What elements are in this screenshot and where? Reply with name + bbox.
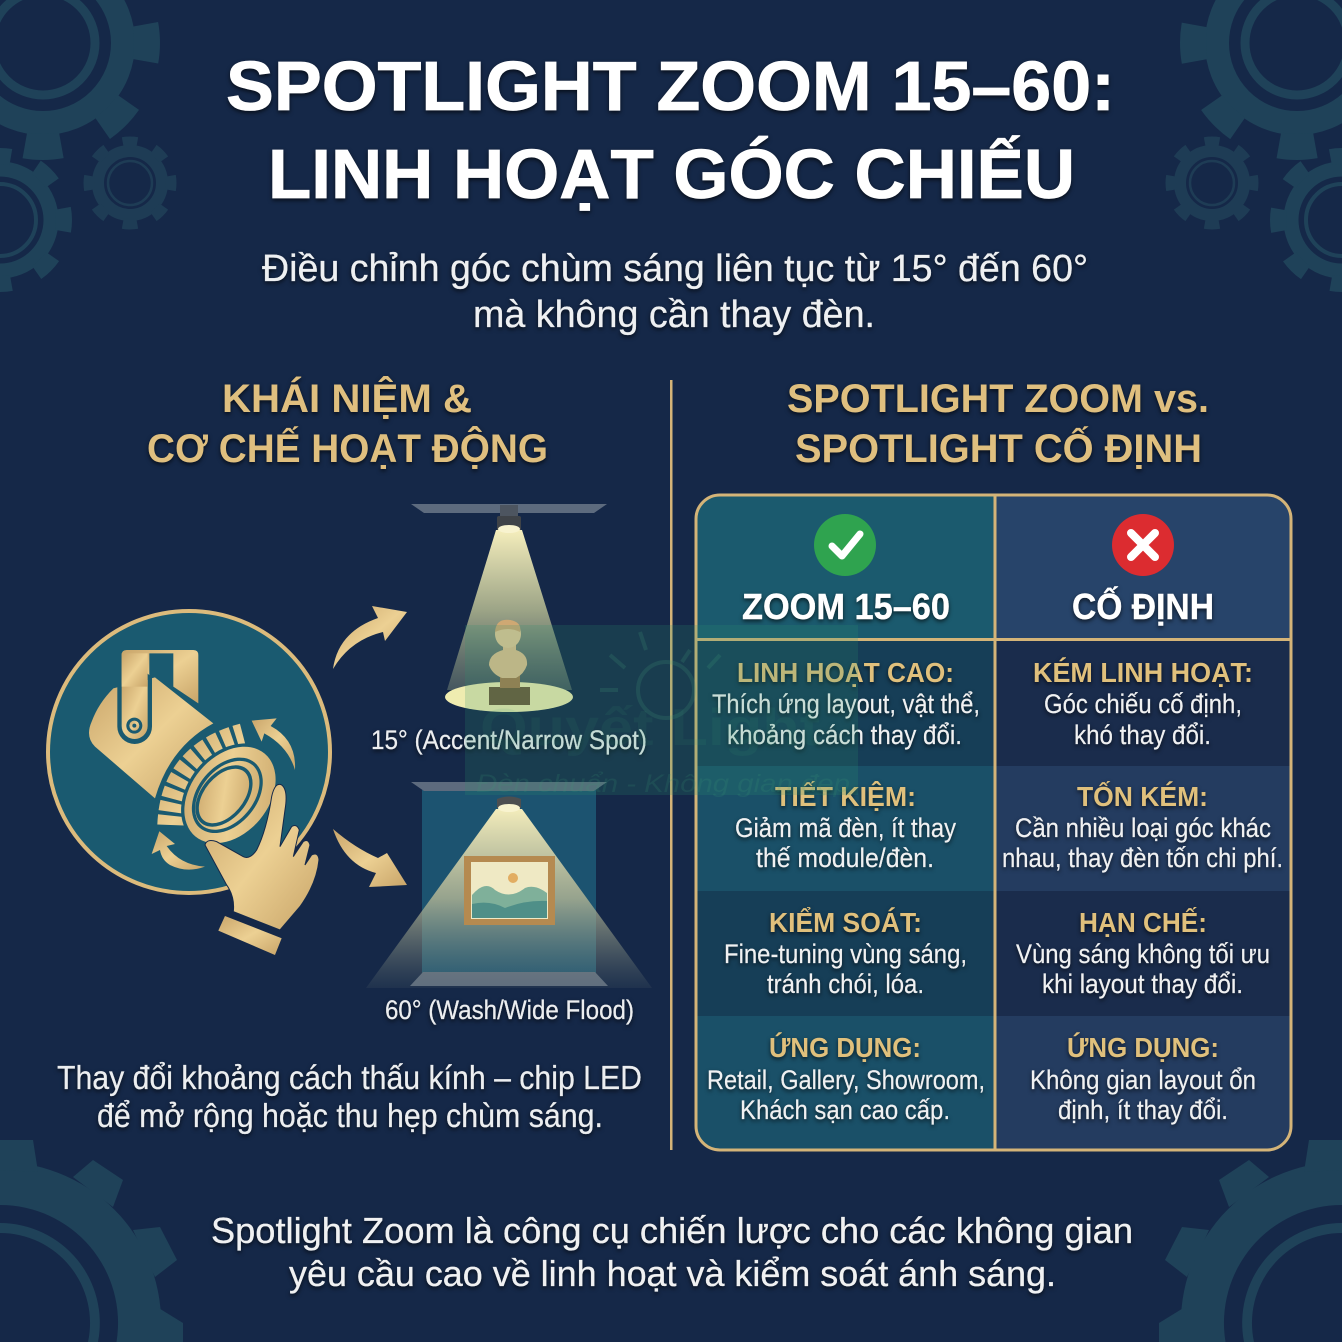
column header: zoom: ZOOM 15–60 (742, 586, 950, 627)
subtitle: mà không cần thay đèn. (473, 294, 875, 336)
fixed: cost: TỐN KÉM: (1077, 780, 1208, 812)
zoom: flexibility (712, 657, 980, 750)
mechanism description (57, 1059, 642, 1134)
zoom: applications: ỨNG DỤNG: (769, 1032, 921, 1063)
closing statement: yêu cầu cao về linh hoạt và kiểm soát ánh sáng. (289, 1253, 1056, 1294)
zoom: flexibility: Thích ứng layout, vật thể, (712, 689, 980, 719)
heading: comparison (787, 377, 1209, 471)
illustration part: bust statue (489, 620, 530, 705)
illustration: 60 degree wide flood (366, 782, 652, 988)
zoom: control: KIỂM SOÁT: (769, 907, 922, 938)
watermark: Đèn chuẩn - Không gian đẹp (476, 770, 850, 798)
zoom: control (724, 907, 967, 999)
icon part: rotation arrows (152, 718, 295, 870)
icon part: spotlight head (89, 650, 299, 866)
heading: comparison: SPOTLIGHT ZOOM vs. (787, 377, 1209, 421)
illustration: 15 degree narrow spot (411, 504, 607, 712)
subtitle: Điều chỉnh góc chùm sáng liên tục từ 15° đến 60° (262, 248, 1088, 290)
label: 15 degree: 15° (Accent/Narrow Spot) (371, 725, 647, 755)
zoom: savings: TIẾT KIỆM: (775, 781, 916, 812)
fixed: limits (1016, 907, 1270, 999)
arrow: to narrow beam (333, 606, 407, 669)
zoom: control: tránh chói, lóa. (767, 969, 924, 999)
fixed: applications: định, ít thay đổi. (1058, 1095, 1228, 1125)
mechanism description: để mở rộng hoặc thu hẹp chùm sáng. (97, 1097, 603, 1134)
title: LINH HOẠT GÓC CHIẾU (268, 135, 1075, 213)
fixed: flexibility: khó thay đổi. (1074, 720, 1211, 750)
fixed: applications (1030, 1032, 1256, 1125)
illustration part: framed landscape (464, 856, 555, 925)
zoom: applications (707, 1032, 985, 1125)
heading: concept and mechanism: KHÁI NIỆM & (222, 375, 472, 421)
heading: comparison: SPOTLIGHT CỐ ĐỊNH (795, 425, 1202, 471)
zoom: control: Fine-tuning vùng sáng, (724, 939, 967, 969)
background gear: bottom right (1159, 1140, 1342, 1342)
heading: concept and mechanism: CƠ CHẾ HOẠT ĐỘNG (147, 425, 548, 471)
icon: red cross (1112, 514, 1174, 576)
fixed: cost: Cần nhiều loại góc khác (1015, 813, 1271, 843)
zoom: applications: Retail, Gallery, Showroom, (707, 1065, 985, 1095)
comparison table (696, 495, 1291, 1150)
fixed: applications: ỨNG DỤNG: (1067, 1032, 1219, 1063)
heading: concept and mechanism (147, 375, 548, 471)
fixed: cost: nhau, thay đèn tốn chi phí. (1002, 843, 1283, 873)
fixed: limits: khi layout thay đổi. (1042, 969, 1243, 999)
background gears: top (0, 0, 1342, 284)
watermark: Quyết Light (480, 699, 820, 757)
zoom: flexibility: khoảng cách thay đổi. (727, 720, 962, 750)
title (226, 47, 1115, 213)
illustration part: lit floor (445, 682, 573, 712)
icon: hand adjusting spotlight lens (48, 611, 330, 955)
zoom: savings (735, 781, 956, 873)
closing statement: Spotlight Zoom là công cụ chiến lược cho các không gian (211, 1210, 1133, 1251)
title: SPOTLIGHT ZOOM 15–60: (226, 47, 1115, 125)
closing statement (211, 1210, 1133, 1294)
fixed: limits: Vùng sáng không tối ưu (1016, 939, 1270, 969)
column divider (670, 380, 672, 1150)
background gear: bottom left (0, 1140, 183, 1342)
column header: fixed: CỐ ĐỊNH (1072, 585, 1214, 627)
zoom: applications: Khách sạn cao cấp. (740, 1095, 950, 1125)
icon part: hand (205, 784, 319, 955)
fixed: flexibility (1033, 657, 1253, 750)
zoom: savings: thế module/đèn. (756, 843, 934, 873)
icon: green check (814, 514, 876, 576)
fixed: cost (1002, 780, 1283, 873)
zoom: savings: Giảm mã đèn, ít thay (735, 813, 956, 843)
watermark (465, 625, 858, 798)
label: 60 degree: 60° (Wash/Wide Flood) (385, 995, 634, 1025)
mechanism description: Thay đổi khoảng cách thấu kính – chip LED (57, 1059, 642, 1096)
fixed: applications: Không gian layout ổn (1030, 1065, 1256, 1095)
fixed: limits: HẠN CHẾ: (1079, 907, 1207, 938)
fixed: flexibility: Góc chiếu cố định, (1044, 689, 1242, 719)
fixed: flexibility: KÉM LINH HOẠT: (1033, 657, 1253, 688)
zoom: flexibility: LINH HOẠT CAO: (737, 657, 954, 688)
arrow: to wide beam (333, 829, 407, 887)
subtitle (262, 248, 1088, 336)
